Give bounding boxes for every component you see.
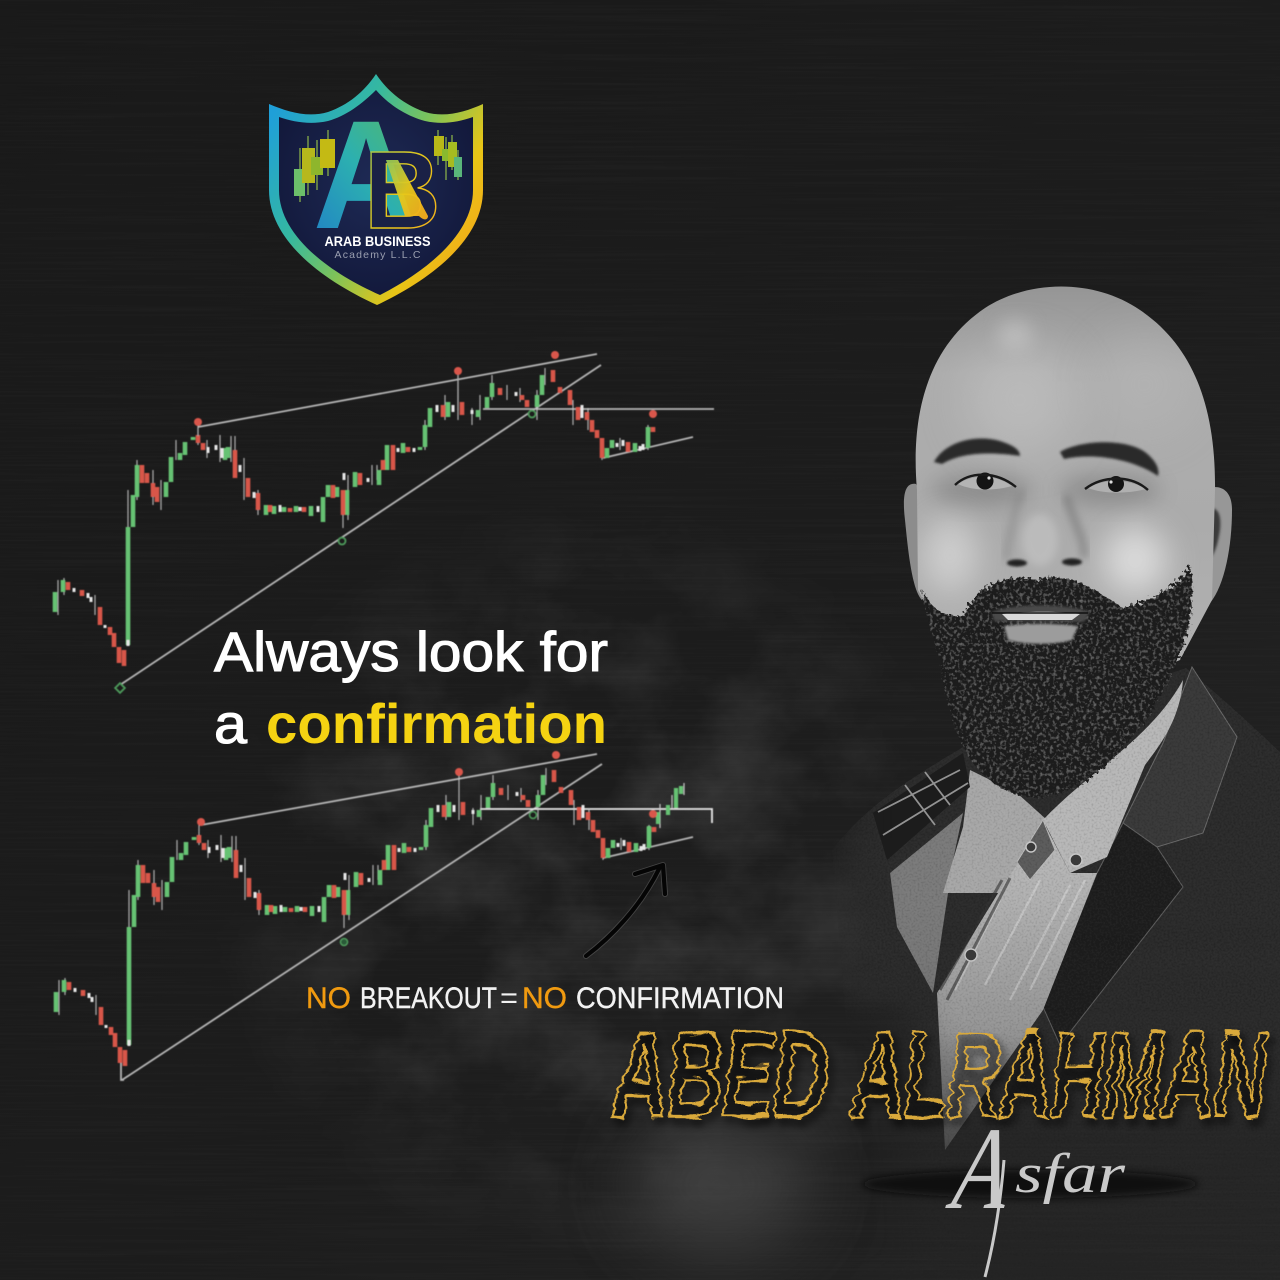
trendlines — [120, 354, 714, 685]
left ear — [904, 484, 928, 600]
candlesticks right — [434, 130, 462, 180]
caption: no breakout = no confirmation: NO — [306, 982, 351, 1015]
headline line 2: a — [214, 692, 248, 755]
plaid scarf collar — [873, 753, 970, 860]
shirt — [937, 825, 1097, 1150]
chart 1: rising wedge before confirmation — [55, 351, 714, 693]
signature: Asfar: A — [941, 1102, 1020, 1234]
candlesticks — [56, 768, 654, 1066]
caption: no breakout = no confirmation: = — [500, 982, 518, 1015]
breakout candles — [660, 783, 684, 828]
portrait of presenter — [832, 286, 1280, 1280]
clothing — [852, 666, 1280, 1150]
logo: Arab Business Academy shield — [269, 74, 483, 305]
signature: Asfar — [941, 1102, 1125, 1277]
upper lapel — [1123, 667, 1237, 847]
monogram A: A — [313, 88, 419, 261]
logo name: ARAB BUSINESS — [324, 234, 430, 249]
shield — [269, 74, 483, 305]
jacket — [852, 668, 1280, 1130]
lower lapel — [1043, 823, 1183, 1045]
presenter first name — [608, 1004, 1266, 1140]
presenter first name: ABED — [608, 1004, 826, 1140]
caption: no breakout = no confirmation: BREAKOUT — [360, 982, 497, 1015]
face shading — [922, 321, 1195, 594]
headline — [214, 620, 608, 755]
highlighted word: confirmation — [266, 692, 607, 755]
logo subtitle: Academy L.L.C — [334, 249, 421, 261]
background — [260, 539, 1280, 1280]
candlesticks — [55, 368, 653, 666]
eyes — [955, 472, 1148, 493]
shirt collar — [1043, 680, 1183, 873]
head — [916, 286, 1215, 720]
signature: Asfar: sfar — [1015, 1143, 1125, 1205]
beard — [923, 565, 1192, 797]
headline line 1: Always look for — [214, 620, 608, 683]
monogram B: B — [364, 128, 441, 251]
brush stroke behind signature — [862, 1170, 1198, 1198]
left jacket panel — [890, 813, 963, 993]
caption: no breakout = no confirmation: CONFIRMATION — [576, 982, 784, 1015]
chart 2: no breakout, no confirmation — [56, 751, 712, 1080]
eyebrows — [934, 439, 1158, 476]
candlesticks left — [294, 130, 335, 202]
caption: no breakout = no confirmation: NO — [522, 982, 567, 1015]
right ear — [1190, 487, 1232, 605]
pivot markers — [197, 751, 657, 946]
buttons — [965, 842, 1082, 961]
arrow pointing at support line — [586, 865, 665, 956]
nose — [1007, 558, 1082, 567]
trendlines — [121, 754, 712, 1080]
skin of neck — [943, 770, 1047, 893]
pivot markers — [115, 351, 657, 693]
caption: no breakout = no confirmation — [306, 982, 784, 1015]
mouth — [992, 605, 1090, 644]
